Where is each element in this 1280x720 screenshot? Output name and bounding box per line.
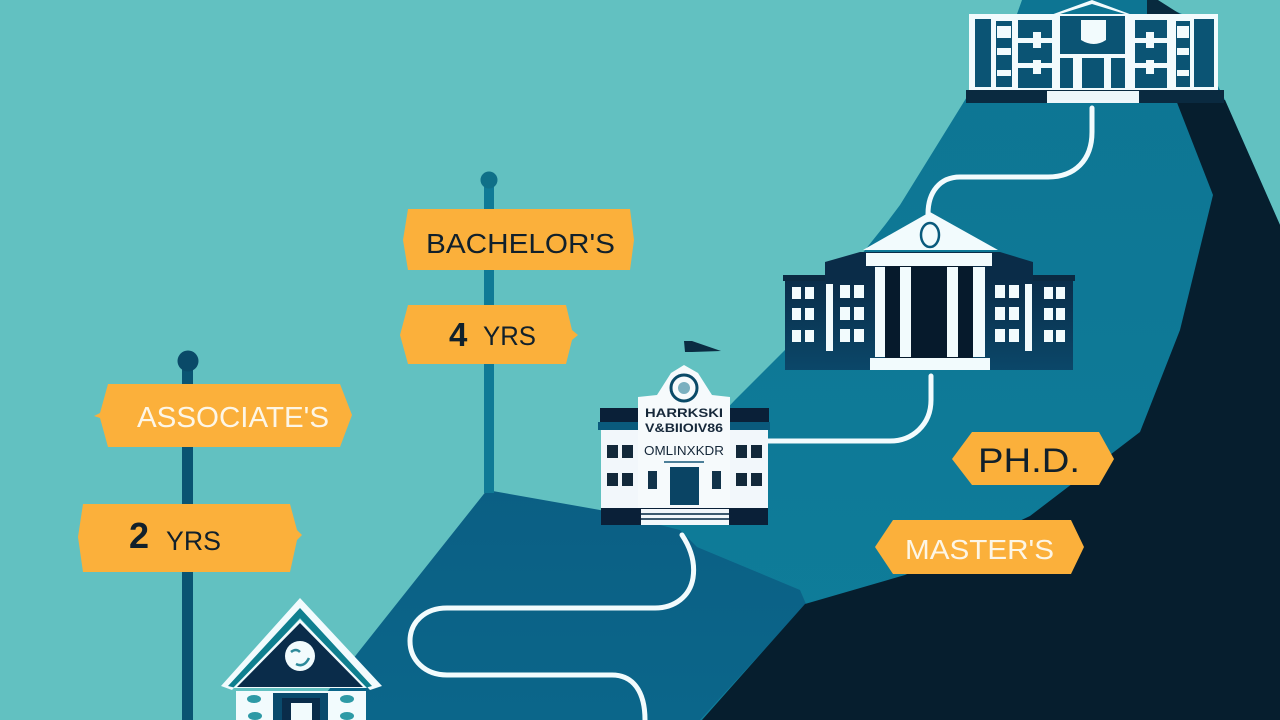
building: bachelor's college: V&BIIOIV86 bbox=[645, 421, 723, 435]
building: ph.d. university bbox=[966, 0, 1224, 103]
winding path: bachelor's to master's bbox=[768, 376, 931, 441]
building: master's university bbox=[783, 212, 1075, 370]
building: community college house bbox=[221, 598, 382, 720]
sign: 2 yrs: YRS bbox=[166, 526, 221, 556]
sign: 4 yrs: 4 bbox=[449, 316, 468, 353]
sign: bachelor's bbox=[403, 209, 634, 270]
sign: associate's: ASSOCIATE'S bbox=[137, 402, 329, 434]
building: bachelor's college: HARRKSKI bbox=[645, 406, 723, 420]
sign: ph.d. bbox=[952, 432, 1114, 485]
mountain: dark foreground ridge bbox=[702, 100, 1280, 720]
mountain: upper teal slope bbox=[640, 0, 1280, 720]
icon: flag bbox=[684, 341, 721, 352]
sign: associate's bbox=[94, 384, 352, 447]
signpost: associate's pole bbox=[178, 350, 198, 720]
signpost: bachelor's pole bbox=[480, 172, 498, 493]
sign: 2 yrs bbox=[78, 504, 302, 572]
mountain: lower blue hill bbox=[305, 490, 806, 720]
mountain: dark summit behind top building bbox=[1147, 0, 1180, 14]
sign: 4 yrs: YRS bbox=[483, 321, 536, 351]
sign: 2 yrs: 2 bbox=[129, 515, 149, 556]
sign: master's: MASTER'S bbox=[905, 534, 1054, 565]
winding path: master's to ph.d. bbox=[928, 108, 1092, 214]
sign: master's bbox=[875, 520, 1084, 574]
building: bachelor's college: OMLINXKDR bbox=[644, 443, 724, 458]
building: bachelor's college bbox=[598, 341, 770, 525]
sign: bachelor's: BACHELOR'S bbox=[426, 228, 615, 259]
sign: ph.d.: PH.D. bbox=[978, 442, 1080, 480]
sign: 4 yrs bbox=[400, 305, 578, 364]
winding path: hill to bachelor's bbox=[410, 535, 694, 720]
